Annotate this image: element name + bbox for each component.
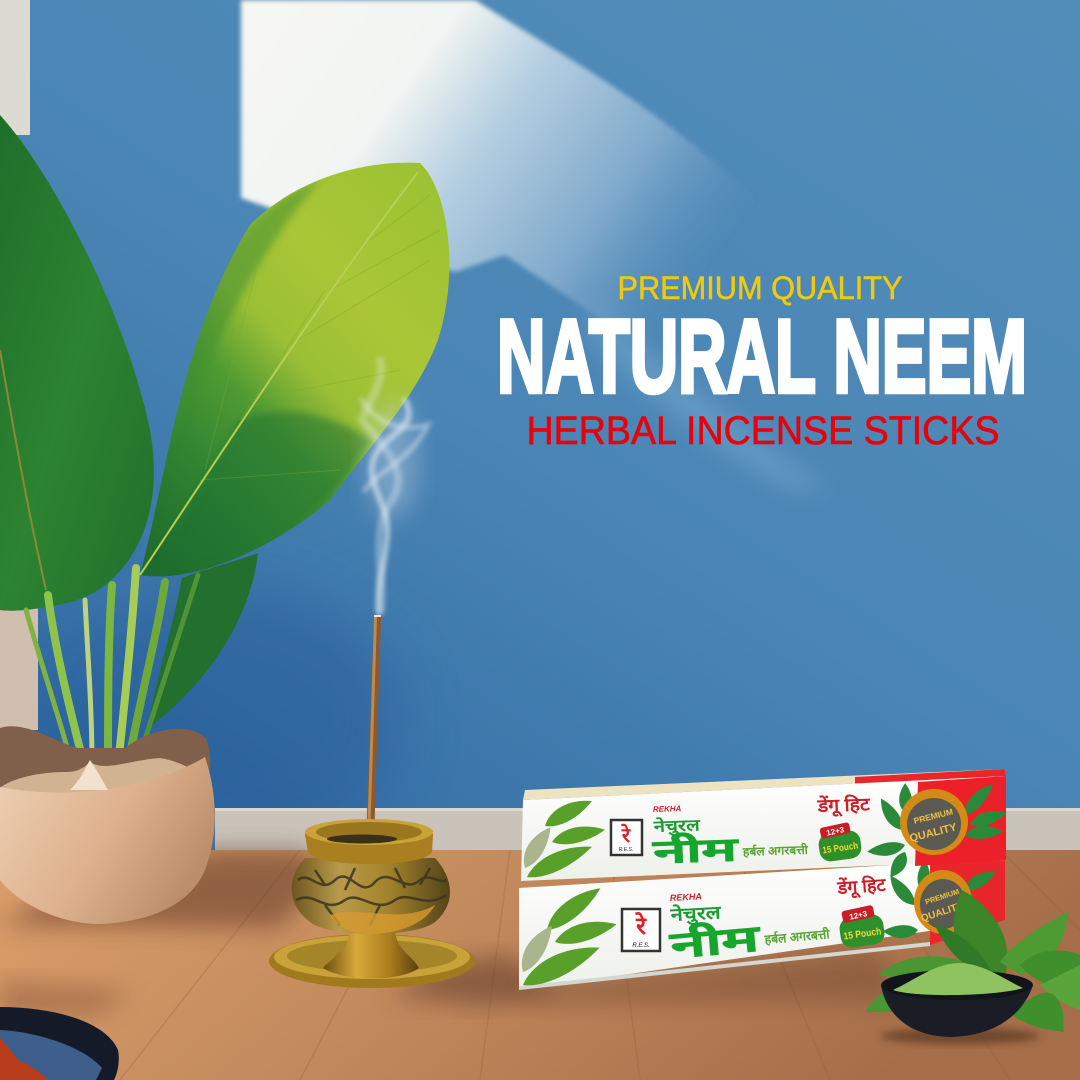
holder foot	[323, 930, 419, 978]
wall background	[0, 0, 1080, 850]
box 1 pouch badge	[817, 822, 863, 863]
bowl	[881, 985, 1033, 1037]
green powder	[893, 963, 1023, 995]
left large leaf	[0, 115, 154, 611]
box 1 labels: डेंगू हिट	[816, 793, 871, 818]
box 1 labels	[651, 793, 871, 870]
neem powder bowl with leaves	[865, 890, 1080, 1044]
box 1 pouch badge: 12+3	[826, 825, 846, 838]
decorative bowl bottom left	[0, 1007, 119, 1080]
box 1 quality seal: PREMIUM	[913, 806, 954, 826]
incense stick	[366, 615, 381, 842]
plant pot	[0, 726, 215, 924]
box 2 labels: REKHA	[670, 891, 702, 903]
eyebrow: PREMIUM QUALITY	[618, 270, 902, 306]
box 1 quality seal: QUALITY	[908, 821, 959, 845]
product box 1 (top)	[517, 769, 1008, 884]
box 1 logo: R.E.S.	[619, 847, 633, 853]
box 1 labels: नेचुरल	[652, 815, 702, 837]
incense smoke	[362, 360, 428, 612]
bowl shadow	[880, 1028, 1040, 1044]
main sunlit leaf	[140, 163, 449, 576]
box 1 quality seal	[866, 779, 1008, 881]
box 2 logo: रे	[635, 912, 647, 940]
loose leaves	[865, 890, 1080, 1032]
box 2 labels: डेंगू हिट	[836, 874, 887, 900]
box 1 labels: नीम	[651, 830, 741, 870]
box 1 labels: REKHA	[653, 804, 682, 814]
brass incense holder	[269, 819, 475, 988]
stems	[26, 568, 198, 765]
baseboard	[215, 808, 1080, 851]
box 2 pouch badge	[838, 905, 886, 949]
box 2 pouch badge: 12+3	[849, 909, 869, 922]
holder rim	[305, 820, 433, 864]
box 1 labels: हर्बल अगरबत्ती	[742, 843, 809, 859]
box 1 pouch badge: 15 Pouch	[822, 841, 859, 856]
box 2 logo	[622, 909, 660, 951]
box 2 pouch badge: 15 Pouch	[843, 926, 882, 943]
holder saucer	[269, 934, 475, 988]
box 2 quality seal	[883, 860, 998, 939]
box 2 labels: नेचुरल	[669, 901, 722, 927]
box 2 quality seal: QUALITY	[920, 901, 965, 925]
box 1 neem leaves	[517, 793, 606, 884]
box 1 logo: रे	[621, 823, 631, 847]
back dark leaf	[148, 553, 258, 728]
headline	[497, 270, 1027, 453]
box 1 logo	[611, 820, 642, 855]
box 2 logo: R.E.S.	[632, 943, 650, 949]
sunlight beam on wall	[241, 0, 830, 490]
holder body	[292, 858, 450, 934]
product box 2 (front)	[514, 858, 1005, 993]
box 2 neem leaves	[514, 880, 619, 993]
box 2 quality seal: PREMIUM	[924, 887, 960, 906]
box 2 labels	[667, 874, 887, 966]
plant	[0, 115, 449, 924]
box 2 labels: हर्बल अगरबत्ती	[763, 926, 831, 947]
wooden floor	[0, 850, 1080, 1080]
subtitle: HERBAL INCENSE STICKS	[526, 409, 1000, 453]
box 2 labels: नीम	[667, 917, 763, 966]
